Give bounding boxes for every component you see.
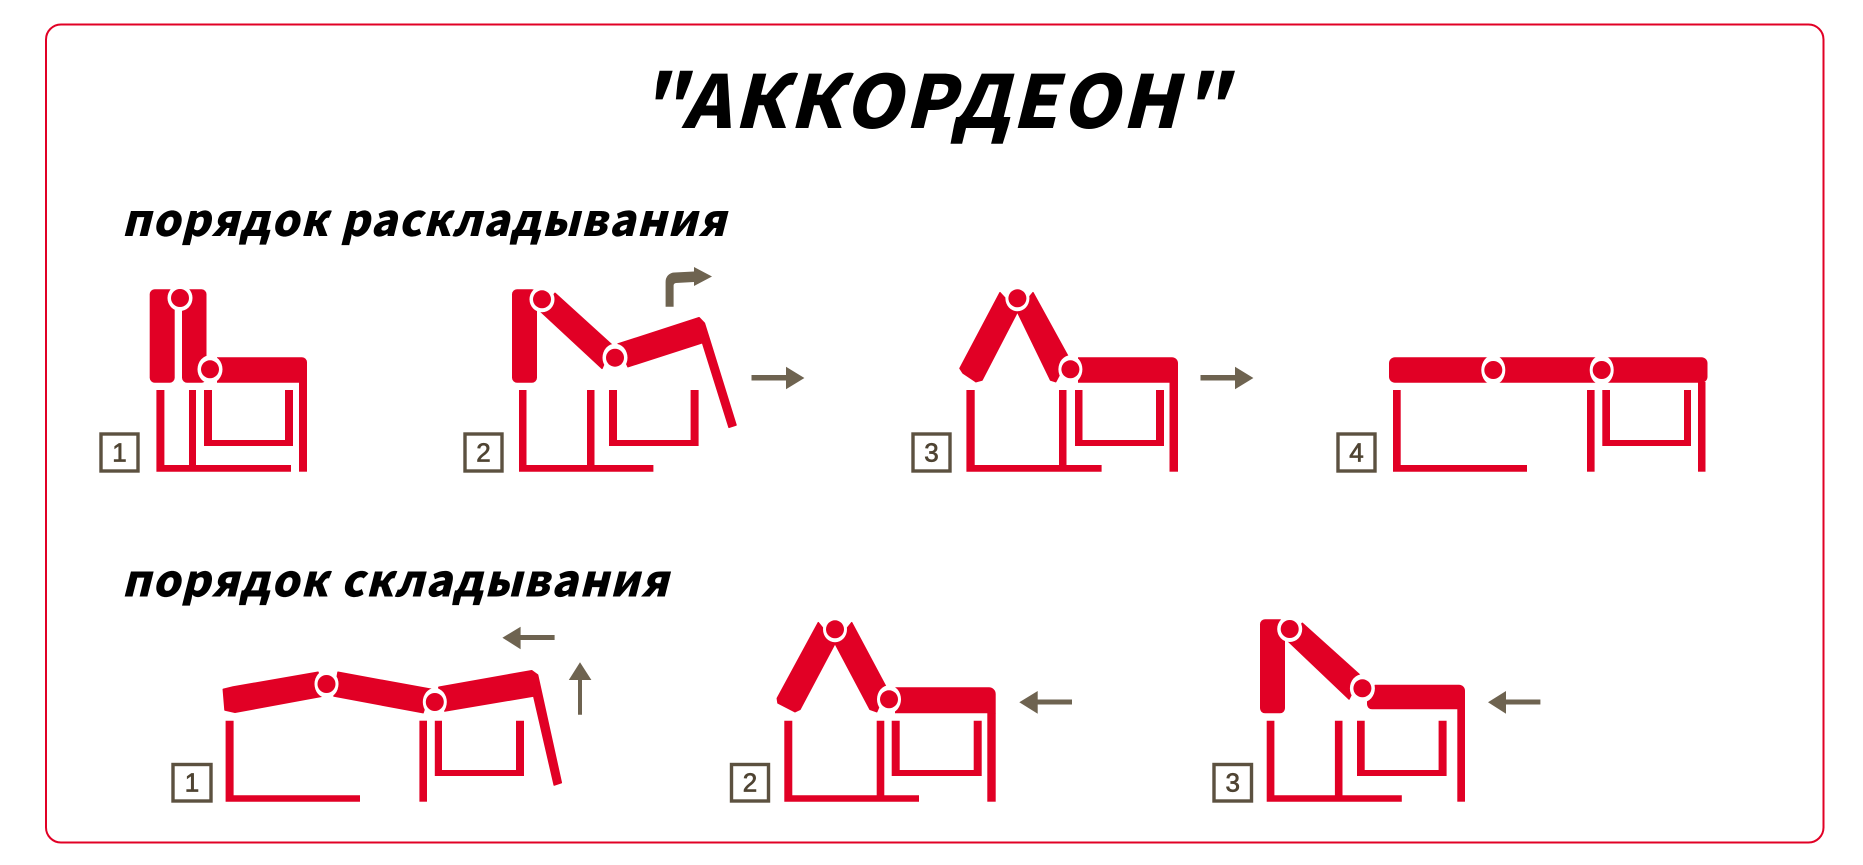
step number 4: 4 (1349, 438, 1364, 468)
step number 3 (913, 434, 950, 471)
folding step 1 (173, 627, 591, 802)
sofa frame (156, 382, 307, 472)
arrow: left (1019, 691, 1072, 714)
arrow: bent up and right (666, 267, 712, 307)
sofa frame (784, 713, 996, 802)
sofa cushions (1389, 355, 1708, 385)
arrow: step 3 to step 4 (1200, 367, 1253, 389)
sofa cushions (777, 616, 996, 713)
step number 1 (101, 434, 138, 471)
unfolding step 3 (913, 285, 1178, 472)
step number 2: 2 (743, 768, 757, 798)
sofa frame (519, 390, 699, 472)
heading: folding order: порядок складывания (122, 546, 671, 610)
arrow: left (502, 627, 555, 649)
unfolding step 2 (465, 267, 736, 472)
folding step 2 (732, 616, 1072, 802)
arrow: step 2 to step 3 (752, 367, 804, 389)
sofa cushions (1260, 616, 1465, 713)
step number 3: 3 (1225, 768, 1240, 798)
step number 1 (173, 764, 211, 801)
step number 1: 1 (112, 438, 127, 468)
sofa cushions (960, 285, 1178, 383)
sofa cushions (223, 670, 561, 785)
step number 4 (1338, 434, 1375, 471)
heading: unfolding order: порядок раскладывания (122, 185, 729, 249)
title: "АККОРДЕОН" (639, 44, 1236, 150)
arrow: up (569, 662, 591, 715)
folding step 3 (1214, 616, 1540, 802)
step number 3 (1214, 764, 1252, 801)
step number 2 (465, 434, 502, 471)
unfolding step 4 (1338, 355, 1708, 472)
sofa cushions (150, 285, 307, 383)
sofa frame (1393, 382, 1706, 472)
arrow: left (1488, 691, 1540, 714)
sofa frame (966, 382, 1178, 472)
sofa cushions (512, 286, 736, 427)
step number 1: 1 (185, 768, 199, 798)
sofa frame (1267, 709, 1465, 802)
step number 2: 2 (476, 438, 491, 468)
sofa frame (226, 721, 524, 802)
step number 2 (732, 764, 768, 801)
unfolding step 1 (101, 285, 307, 472)
step number 3: 3 (924, 438, 939, 468)
